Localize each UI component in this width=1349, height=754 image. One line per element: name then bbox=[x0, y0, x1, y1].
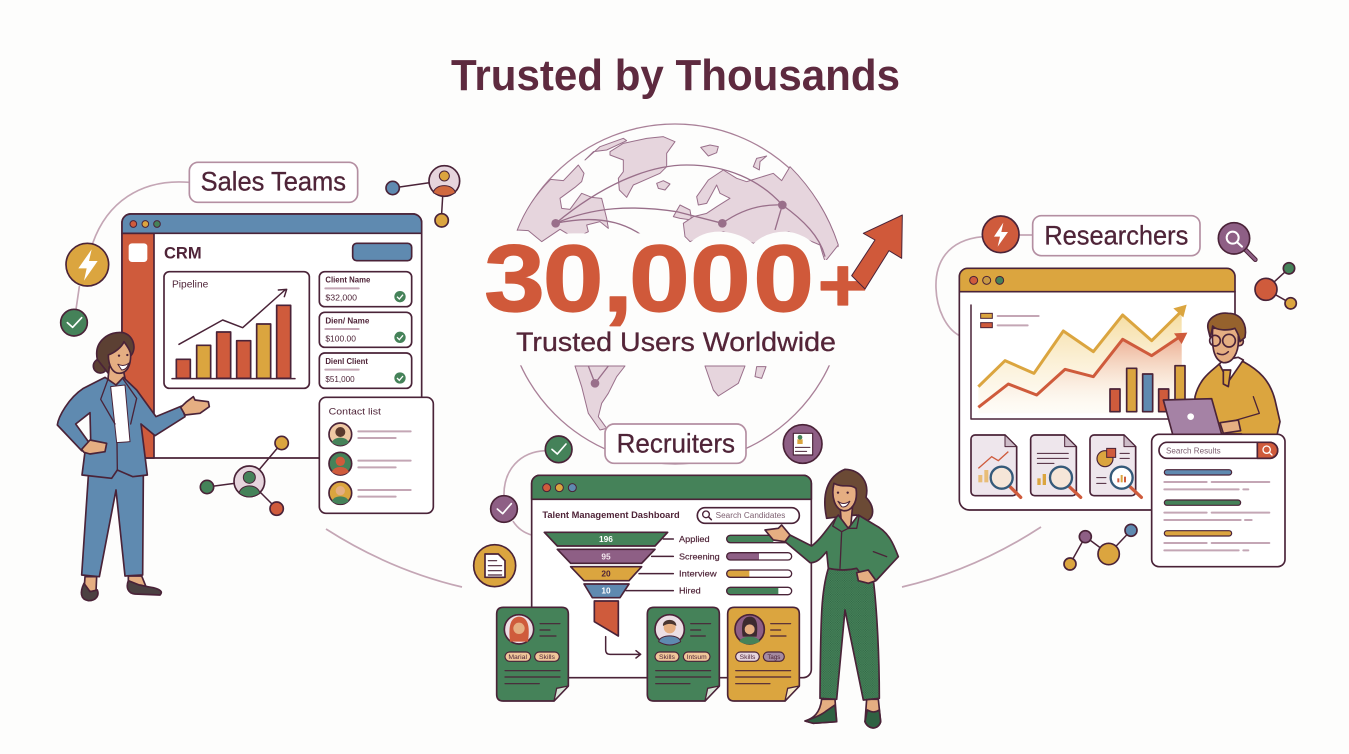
funnel: 10 bbox=[601, 586, 611, 596]
white backing behind number bbox=[473, 231, 853, 365]
funnel: 196 bbox=[599, 534, 613, 544]
funnel labels and bars bbox=[679, 534, 792, 596]
panel: recruiters bbox=[474, 424, 898, 728]
panel: sales teams bbox=[61, 162, 460, 458]
client cards: Client Name bbox=[325, 275, 371, 285]
funnel labels and bars: Hired bbox=[679, 586, 701, 596]
search results panel bbox=[1152, 434, 1285, 567]
pants bbox=[820, 568, 879, 700]
icon: lightning bbox=[66, 243, 109, 286]
candidate card 1: Skills bbox=[539, 654, 556, 661]
search pill: Search Candidates bbox=[716, 511, 785, 520]
pants bbox=[82, 468, 143, 577]
search pill bbox=[697, 508, 799, 523]
label: researchers bbox=[1033, 216, 1200, 256]
candidate card 3: Tags bbox=[767, 654, 781, 661]
candidate card 2: Intsum bbox=[687, 654, 707, 661]
network: top bbox=[386, 166, 460, 227]
title: Trusted by Thousands bbox=[451, 51, 900, 100]
collar and tie bbox=[1219, 357, 1243, 382]
arc lower edge mask bbox=[480, 260, 857, 365]
dashboard window: Talent Management Dashboard bbox=[542, 510, 680, 520]
search results panel: Search Results bbox=[1166, 445, 1221, 455]
big number: 0 bbox=[753, 225, 814, 331]
big number: 0 bbox=[690, 225, 751, 331]
funnel labels and bars: Interview bbox=[679, 569, 717, 579]
report document 3 bbox=[1090, 435, 1141, 497]
label: sales teams: Sales Teams bbox=[201, 167, 346, 197]
funnel bbox=[544, 532, 673, 636]
figure: researcher man bbox=[1163, 313, 1280, 437]
research window bbox=[959, 268, 1235, 510]
network: bottom bbox=[1064, 524, 1137, 570]
candidate card 2: Skills bbox=[659, 654, 676, 661]
globe outline bbox=[505, 124, 845, 464]
line chart bbox=[971, 305, 1187, 419]
hair bbox=[825, 469, 873, 522]
report document 1 bbox=[971, 435, 1021, 497]
hand bbox=[1220, 420, 1241, 433]
hair back and bun bbox=[93, 359, 107, 373]
client cards: Dienl Client bbox=[325, 356, 368, 366]
big number: 3 bbox=[484, 225, 545, 331]
funnel: 20 bbox=[601, 569, 611, 579]
client cards bbox=[319, 272, 412, 388]
funnel labels and bars: Applied bbox=[679, 534, 710, 544]
icon: growth arrow bbox=[852, 215, 902, 289]
client cards: $51,000 bbox=[325, 374, 355, 384]
big number: 0 bbox=[543, 225, 604, 331]
contact list: Contact list bbox=[329, 406, 381, 416]
candidate card 3: Skills bbox=[740, 654, 756, 661]
network: lower bbox=[200, 436, 288, 515]
funnel labels and bars: Screening bbox=[679, 551, 720, 561]
client cards: $100.00 bbox=[325, 333, 356, 343]
panel: researchers bbox=[936, 216, 1296, 570]
icon: green check bbox=[545, 436, 572, 463]
flow arrow bbox=[606, 637, 641, 658]
lapels bbox=[101, 378, 137, 470]
network: right bbox=[1255, 263, 1296, 309]
connector bbox=[936, 235, 1033, 335]
figure: sales woman bbox=[57, 332, 209, 601]
candidate card 1 bbox=[497, 607, 568, 701]
big number: , bbox=[603, 225, 633, 331]
label: sales teams bbox=[189, 162, 358, 202]
ankle and shoes bbox=[84, 577, 97, 592]
flow curve right bbox=[902, 527, 1041, 587]
figure: recruiter woman bbox=[765, 469, 898, 728]
globe with stat bbox=[473, 124, 857, 464]
icon: search purple bbox=[1218, 223, 1255, 260]
hands bbox=[181, 397, 209, 415]
pipeline chart bbox=[164, 272, 309, 388]
report document 2 bbox=[1031, 435, 1081, 497]
jacket bbox=[57, 377, 185, 478]
big number: 0 bbox=[629, 225, 690, 331]
client cards: Dien/ Name bbox=[325, 315, 370, 325]
dashboard window bbox=[532, 475, 811, 678]
big number: + bbox=[818, 244, 868, 328]
face bbox=[108, 342, 131, 373]
icon: lightning red bbox=[982, 216, 1019, 253]
neck and face bbox=[840, 505, 853, 527]
shoes bbox=[805, 699, 837, 723]
glasses bbox=[1210, 335, 1220, 346]
icon: document gold bbox=[474, 545, 516, 587]
funnel: 95 bbox=[601, 551, 611, 561]
laptop bbox=[1163, 399, 1222, 434]
label: researchers: Researchers bbox=[1044, 220, 1188, 250]
blouse bbox=[785, 515, 898, 583]
panel: contact list and network bbox=[57, 332, 433, 601]
pipeline chart: Pipeline bbox=[172, 279, 209, 290]
shirt bbox=[111, 385, 130, 443]
icon: check bbox=[61, 309, 87, 336]
flow curve left bbox=[326, 529, 462, 587]
hands bbox=[765, 525, 790, 542]
neck bbox=[108, 367, 126, 389]
candidate card 3 bbox=[728, 607, 799, 701]
crm window bbox=[122, 214, 422, 458]
client cards: $32,000 bbox=[325, 293, 357, 303]
subtitle: Trusted Users Worldwide bbox=[516, 327, 836, 357]
contact list bbox=[319, 397, 433, 513]
icon: certificate bbox=[783, 425, 822, 463]
sweater bbox=[1193, 362, 1280, 437]
connector bbox=[504, 451, 545, 535]
land masses bbox=[517, 137, 838, 430]
label: recruiters: Recruiters bbox=[617, 428, 735, 458]
crm window: CRM bbox=[164, 243, 202, 262]
icon: purple check bbox=[491, 496, 517, 522]
candidate card 2 bbox=[647, 607, 719, 701]
label: recruiters bbox=[605, 424, 746, 463]
connection arcs bbox=[551, 165, 825, 388]
candidate card 1: Marial bbox=[508, 654, 528, 661]
head bbox=[1235, 338, 1243, 346]
